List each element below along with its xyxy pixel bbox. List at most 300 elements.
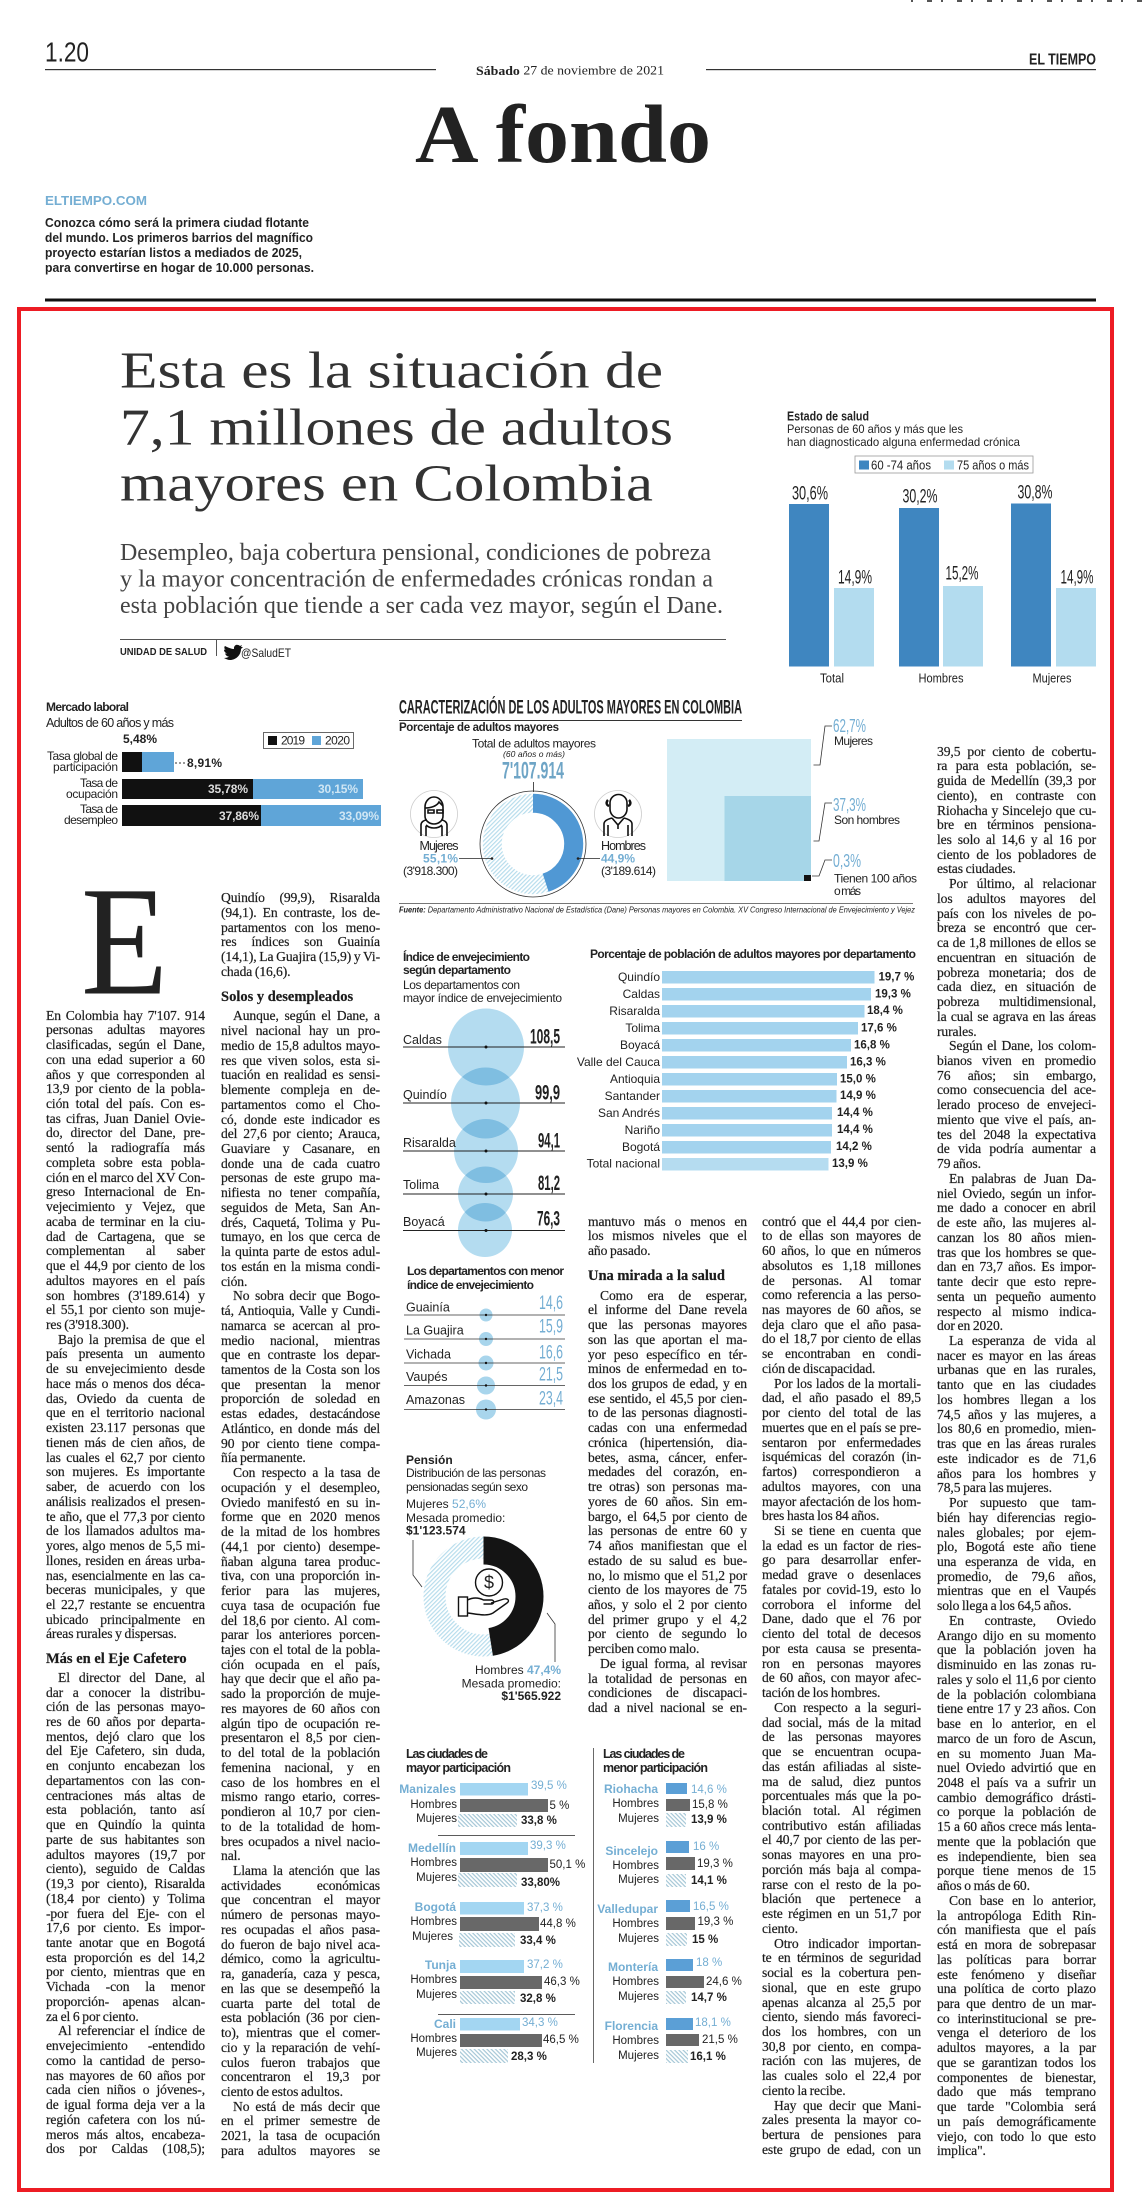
article column 5: este indicador es de 71,6 [937, 1451, 1096, 1466]
article column 3: yores de 60 años. Sin em- [588, 1494, 747, 1509]
article column 2: 90 por ciento tiene compa- [221, 1436, 380, 1451]
article column 5: este fenómeno y diseñar [937, 1967, 1096, 1982]
Sincelejo: 14,1 % [691, 1875, 727, 1887]
article column 5: En contraste, Oviedo [949, 1613, 1096, 1628]
article column 4: porción más baja al compa- [762, 1862, 921, 1877]
Sincelejo: 16 % [693, 1841, 719, 1853]
article column 5: un país demográficamente [937, 2114, 1096, 2129]
article column 2: para adultos mayores se [221, 2143, 380, 2158]
article column 4: adultos mayores, con una [762, 1479, 921, 1494]
article column 4: bertura de pensiones para [762, 2127, 921, 2142]
article column 5: mente que la población que [937, 1834, 1096, 1849]
row: Quindio: 19,7 % [878, 972, 914, 984]
label: hombres pension: Mesada promedio: [462, 1676, 561, 1690]
heading [406, 1747, 511, 1775]
article column 5: es independiente, bien sea [937, 1849, 1096, 1864]
Valledupar: Hombres [612, 1918, 659, 1930]
callout: 0,3%: Tienen 100 años [834, 872, 917, 886]
row: Tolima [403, 1172, 565, 1196]
Valledupar: 19,3 % [698, 1916, 733, 1928]
article column 4: das están afiliadas al siste- [762, 1759, 921, 1774]
Manizales: Hombres [410, 1799, 457, 1811]
article column 3: año pasado. [588, 1243, 650, 1258]
article column 3: son las que aportan el ma- [588, 1332, 747, 1347]
bars total [789, 484, 874, 686]
article column 1: de los llamados adultos ma- [46, 1523, 205, 1538]
icon: hand holding coin [458, 1569, 508, 1616]
article column 4: dos los hombres, con un [762, 2024, 921, 2039]
Monteria: 24,6 % [706, 1976, 742, 1988]
Manizales [399, 1780, 569, 1827]
article column 4: el 40,7 por ciento de las per- [762, 1832, 921, 1847]
article column 5: componentes de bienestar, [937, 2070, 1096, 2085]
total adultos mayores [472, 736, 596, 792]
article column 5: Riohacha y Sincelejo que cu- [937, 803, 1096, 818]
article column 4: ción de discapacidad. [762, 1361, 875, 1376]
Bogota: 33,4 % [520, 1935, 556, 1947]
main headline [120, 342, 673, 512]
article column 1: como la cantidad de perso- [46, 2053, 205, 2068]
mercado laboral heading: Adultos de 60 años y más [46, 716, 174, 730]
article column 2: cuya tasa de ocupación fue [221, 1598, 380, 1613]
row: Boyaca [620, 1038, 890, 1052]
article column 1: departamentos con las con- [46, 1773, 205, 1788]
article column 5: años o más de 60. [937, 1878, 1030, 1893]
article column 1 [46, 1008, 206, 2156]
article column 3: los mismos niveles que el [588, 1228, 747, 1243]
article column 4: ciento. [762, 1921, 798, 1936]
article column 4: ciento del total de decesos [762, 1626, 921, 1641]
Florencia: 21,5 % [702, 2034, 738, 2046]
article column 1: las cuales el 62,7 por ciento [46, 1450, 205, 1465]
Bogota: 44,8 % [540, 1918, 576, 1930]
article column 2: número de personas mayo- [221, 1907, 380, 1922]
article column 5: venga el deterioro de los [937, 2025, 1096, 2040]
article column 2: medio de 15,8 adultos mayo- [221, 1038, 380, 1053]
Bogota: Mujeres [412, 1931, 453, 1943]
article column 5: me dado a conocer en abril [937, 1200, 1096, 1215]
Valledupar: 16,5 % [693, 1901, 729, 1913]
article column 3: ciento de los mayores de 75 [588, 1582, 747, 1597]
Florencia [605, 2017, 738, 2063]
heading [603, 1747, 708, 1775]
callout: 0,3%: o más [834, 884, 861, 898]
row: San Andres: 14,4 % [837, 1107, 873, 1119]
article column 5: los hombres llegan a los [937, 1392, 1096, 1407]
article column 2: démico, como la agricultu- [221, 1951, 380, 1966]
article column 2: donde una de cada cuatro [221, 1156, 380, 1171]
article column 3: años, y solo el 2 por ciento [588, 1597, 747, 1612]
article column 4 [762, 1214, 922, 2158]
label: hombres pension [462, 1613, 561, 1703]
article column 1: existen 23.117 personas que [46, 1420, 205, 1435]
section title: A fondo [415, 88, 711, 180]
label: mujeres pension: Mujeres 52,6% [406, 1497, 486, 1511]
article column 3: medades del corazón, en- [588, 1464, 747, 1479]
article column 1: el 55,1 por ciento son muje- [46, 1302, 205, 1317]
article column 2: No está de más decir que [233, 2099, 380, 2114]
article column 1: cada cien niños o jóvenes-, [46, 2082, 205, 2097]
article column 4: contró que el 44,4 por cien- [762, 1214, 921, 1229]
article column 2: proporción de soledad en [221, 1391, 380, 1406]
Medellin: Medellín [408, 1841, 456, 1855]
article column 4: apenas alcanza al 25,5 por [762, 1995, 921, 2010]
Riohacha: 14,6 % [691, 1784, 727, 1796]
Cali [410, 2017, 579, 2063]
article column 4: dad social, más de la mitad [762, 1715, 921, 1730]
article column 2: ción ocupada en el país, [221, 1657, 380, 1672]
estado de salud heading: Estado de salud [787, 408, 869, 424]
article column 3: no, lo mismo que el 51,2 por [588, 1568, 747, 1583]
row: Risaralda [609, 1004, 903, 1018]
article column 2: res que viven solos, esta si- [221, 1053, 380, 1068]
row: Risaralda: Risaralda [403, 1136, 456, 1150]
legend [855, 456, 1033, 473]
article column 4: 30,8 por ciento, en compa- [762, 2039, 921, 2054]
article column 2: partamentos con los meno- [221, 920, 380, 935]
article column 4: la edad es un factor de ries- [762, 1538, 921, 1553]
article column 2: ocupación y el desempleo, [221, 1480, 380, 1495]
row: Vaupes: 21,5 [539, 1364, 563, 1386]
legend 2019 / 2020 [264, 732, 354, 748]
article column 5: pobreza monetaria; dos de [937, 965, 1096, 980]
row: Antioquia: Antioquia [610, 1072, 660, 1086]
Tunja: 32,8 % [520, 1993, 556, 2005]
icon: hand holding coin: $ [484, 1572, 494, 1592]
article column 1: que en Quindío la quinta [46, 1817, 205, 1832]
article column 1: personas adultas mayores [46, 1022, 205, 1037]
article column 1: áreas rurales y dispersas. [46, 1626, 177, 1641]
menor indice heading: índice de envejecimiento [407, 1278, 534, 1292]
Valledupar [597, 1900, 733, 1946]
article column 5: respecto al mismo indica- [937, 1304, 1096, 1318]
article column 5: una política de corto plazo [937, 1981, 1096, 1996]
article column 1: en conjunto encabezan los [46, 1758, 205, 1773]
article column 2: Quindío (99,9), Risaralda [221, 890, 380, 905]
article column 5: tras que los hombres se que- [937, 1245, 1096, 1260]
article column 4: isquémicas del corazón (in- [762, 1449, 921, 1464]
article column 1: región cafetera con los nú- [46, 2112, 205, 2127]
article column 2: de la mitad de los hombres [221, 1524, 380, 1539]
label: hombres: 44,9% [601, 852, 635, 866]
article column 1: completa sobre esta pobla- [46, 1155, 205, 1170]
row labels: ocupación [66, 787, 118, 801]
row: Amazonas [404, 1388, 565, 1420]
Manizales: 5 % [550, 1800, 569, 1812]
article column 4: go para desarrollar enfer- [762, 1552, 921, 1567]
bar tasa global: 5,48% [123, 732, 157, 746]
article column 3: dad a nivel nacional se en- [588, 1700, 747, 1715]
article column 3: yor peso específico en tér- [588, 1347, 747, 1362]
article column 4: dad, el año pasado el 89,5 [762, 1390, 921, 1405]
article column 5: de la población colombiana [937, 1687, 1096, 1702]
article column 2: Atlántico, en donde más del [221, 1421, 380, 1436]
article column 1: por ciento, mientras que en [46, 1964, 205, 1979]
article column 1: adultos mayores en el país [46, 1273, 205, 1288]
label: hombres pension: Hombres 47,4% [475, 1663, 561, 1677]
row: Tolima: 17,6 % [861, 1022, 897, 1034]
article column 5: país con los niveles de po- [937, 906, 1096, 921]
Florencia: Hombres [612, 2035, 659, 2047]
article column 4: zales presenta la mayor co- [762, 2112, 921, 2127]
article column 1: ción de las personas mayo- [46, 1699, 205, 1714]
article column 1: za el 6 por ciento. [46, 2009, 139, 2024]
article column 2: del 18,6 por ciento. Al com- [221, 1612, 380, 1628]
row: Caldas: Caldas [623, 987, 660, 1001]
byline: @SaludET [241, 646, 292, 660]
Cali: 28,3 % [511, 2051, 547, 2063]
article column 1: 17,6 por ciento. Es impor- [46, 1920, 205, 1935]
article column 1: Bajo la premisa de que el [58, 1332, 205, 1347]
row: Valle del Cauca: Valle del Cauca [577, 1055, 660, 1069]
article column 2: ferior para las mujeres, [221, 1583, 380, 1598]
article column 1: hace más o menos dos déca- [46, 1376, 205, 1391]
article column 5: base en lo anterior, en el [937, 1716, 1096, 1731]
row: Quindio [618, 970, 914, 984]
article column 2: que presentan la menor [221, 1377, 380, 1392]
article column 5: ca de 1,8 millones de ellos se [937, 935, 1096, 950]
article column 5: encuentran en situación de [937, 950, 1096, 965]
article column 4: las cuales solo el 22,4 por [762, 2068, 921, 2083]
Bogota: Hombres [410, 1916, 457, 1928]
article column 5: solo llega a los 64,5 años. [937, 1598, 1071, 1613]
article column 1: esta proporción es del 14,2 [46, 1950, 205, 1965]
article column 1: das, Oviedo da cuenta de [46, 1391, 205, 1406]
article column 2 [220, 890, 380, 2158]
row: Risaralda: Risaralda [609, 1004, 660, 1018]
Monteria: Hombres [612, 1976, 659, 1988]
article column 1: ciento), seguido de Caldas [46, 1861, 205, 1876]
article column 4: por esta causa se presenta- [762, 1641, 921, 1656]
heading: Las ciudades de [406, 1747, 488, 1761]
article column 5: que la población joven ha [937, 1642, 1096, 1657]
source note: Fuente: Departamento Administrativo Nacional de Estadística (Dane) Personas mayores en Colombia. XV Congreso Internacional de Envejecimiento y Vejez [399, 904, 916, 914]
article column 4: Si se tiene en cuenta que [774, 1523, 921, 1538]
bars total: 14,9% [838, 568, 872, 588]
article column 1: saber, de acuerdo con los [46, 1479, 205, 1494]
article column 2: en las que se desempeñó la [221, 1981, 380, 1996]
article column 1: vejecimiento y Vejez, que [46, 1199, 205, 1214]
row: Antioquia: 15,0 % [840, 1074, 876, 1086]
legend 2019 / 2020: 2020 [325, 734, 350, 748]
Florencia: 18,1 % [695, 2017, 731, 2029]
article column 5: tras que en las áreas rurales [937, 1436, 1096, 1451]
article column 3: que las personas mayores [588, 1317, 747, 1332]
Manizales: 39,5 % [531, 1780, 567, 1792]
callout: 37,3%: 37,3% [833, 795, 866, 815]
article column 2: ñaban alguna tarea produc- [221, 1554, 380, 1569]
article column 2: tajes con el total de la pobla- [221, 1642, 380, 1657]
row: Quindio [403, 1082, 565, 1104]
article column 5: La esperanza de vida al [949, 1333, 1096, 1348]
article column 2: estas edades, destacándose [221, 1406, 380, 1421]
Riohacha: 13,9 % [691, 1814, 727, 1826]
legend 2019 / 2020: 2019 [281, 734, 305, 748]
donut: pension por sexo [434, 1548, 532, 1646]
article column 1: acaba de terminar en la ciu- [46, 1214, 205, 1229]
row labels: Tasa global de [47, 749, 118, 763]
article column 2: drés, Caquetá, Tolima y Pu- [221, 1215, 380, 1230]
label: mujeres: Mujeres [420, 839, 458, 853]
bars mujeres [1011, 482, 1096, 686]
callout: 62,7%: 62,7% [833, 716, 866, 736]
label: mujeres pension: Mesada promedio: [406, 1511, 505, 1525]
article column 2: res mayores de 60 años con [221, 1701, 380, 1716]
article column 3: del primer grupo y el 4,2 [588, 1612, 747, 1627]
article column 5: como consecuencia del ace- [937, 1082, 1096, 1097]
row: Total nacional: 13,9 % [832, 1158, 868, 1170]
article column 5: les solo al 14,6 y al 16 por [937, 832, 1096, 847]
total adultos mayores: 7'107.914 [502, 758, 564, 784]
article column 5: adultos mayores, a la par [937, 2040, 1096, 2055]
row: Vaupes: Vaupés [406, 1370, 447, 1384]
callout: 37,3%: Son hombres [834, 813, 900, 827]
article column 2: chada (16,6). [221, 964, 290, 979]
article column 1: tas cifras, Juan Daniel Ovie- [46, 1111, 205, 1126]
byline [120, 639, 726, 660]
article column 5: breza se encontró que cer- [937, 920, 1096, 935]
article column 5: dan en 73,7 años. Es impor- [937, 1259, 1096, 1274]
article column 5: tiene entre 17 y 23 años. Con [937, 1701, 1096, 1716]
article column 2: concentraron el 19,3 por [221, 2069, 380, 2084]
article column 5: de vida podría aumentar a [937, 1141, 1096, 1156]
Tunja: 37,2 % [527, 1959, 563, 1971]
row: Quindio: Quindío [618, 970, 660, 984]
label: mujeres pension [406, 1497, 505, 1587]
row: Caldas [403, 1026, 565, 1048]
bar tasa desempleo: 37,86% [219, 809, 259, 823]
article column 2: Llama la atención que las [233, 1863, 380, 1878]
article column 5: implica". [937, 2143, 986, 2158]
article column 2: res índices son Guainía [221, 934, 380, 949]
article column 5: lerado proceso de envejeci- [937, 1097, 1096, 1112]
date: Sábado 27 de noviembre de 2021 [476, 62, 664, 78]
row: Tolima: Tolima [403, 1178, 439, 1192]
article column 5: la antropóloga Edith Rin- [937, 1908, 1096, 1923]
Florencia: Florencia [605, 2019, 658, 2033]
Monteria: 18 % [696, 1957, 722, 1969]
article column 2: la quinta parte de estos adul- [221, 1244, 380, 1259]
article column 1: El director del Dane, al [58, 1670, 205, 1685]
Valledupar: 15 % [692, 1934, 718, 1946]
article column 4: 60 años, lo que en números [762, 1243, 921, 1258]
article column 1: ción total del país. Con es- [46, 1096, 205, 1111]
article column 5: estas ciudades. [937, 861, 1016, 876]
article column 2: ra, ganadería, caza y pesca, [221, 1966, 380, 1981]
row: Vichada: 16,6 [539, 1342, 563, 1364]
article column 2: namarca se acercan al pro- [221, 1318, 380, 1333]
article column 4: Otro indicador importan- [774, 1936, 921, 1951]
article column 5: la cual se agrava en las áreas [937, 1009, 1096, 1024]
Sincelejo [605, 1841, 733, 1887]
article column 1: dos por Caldas (108,5); [46, 2141, 205, 2156]
article column 3: las personas de entre 60 y [588, 1523, 747, 1538]
article column 2: nivel nacional hay un pro- [221, 1023, 380, 1038]
article column 4: sional, que en este grupo [762, 1980, 921, 1995]
row: Tolima: 81,2 [538, 1172, 560, 1195]
article column 5: nales globales; por ejem- [937, 1525, 1096, 1540]
row: Risaralda: 18,4 % [867, 1005, 903, 1017]
mercado laboral heading [46, 700, 174, 730]
article column 5: 76 años; sin embargo, [937, 1068, 1096, 1083]
article column 2: Oviedo manifestó en su in- [221, 1495, 380, 1510]
legend: 75 años o más [957, 458, 1029, 472]
article column 4: tación de los hombres. [762, 1685, 880, 1700]
article column 4: te en términos de seguridad [762, 1950, 921, 1965]
article column 2: ción. [221, 1274, 247, 1289]
article column 5: promedio, de 79,6 años, [937, 1569, 1096, 1584]
row: Vaupes [404, 1364, 565, 1394]
article column 2: personas de este grupo ma- [221, 1170, 380, 1185]
article column 2: nal. [221, 1848, 241, 1863]
article column 2: to del total de la población [221, 1745, 380, 1760]
article column 1: Más en el Eje Cafetero [46, 1651, 187, 1667]
article column 1: clasificadas, según el Dane, [46, 1037, 205, 1052]
row: Guainia [404, 1293, 565, 1322]
indice heading [403, 949, 562, 1005]
article column 4: social es la cobertura pen- [762, 1965, 921, 1980]
article column 5: en su momento Juan Ma- [937, 1746, 1096, 1761]
article column 5: bién hay diferencias regio- [937, 1510, 1096, 1525]
Sincelejo: Mujeres [618, 1874, 659, 1886]
Medellin: 39,3 % [530, 1840, 566, 1852]
article column 1: adultos mayores (19,7 por [46, 1847, 205, 1862]
article column 2: que concentran el mayor [221, 1892, 380, 1907]
estado de salud heading [787, 408, 1020, 449]
article column 4: contributivo están afiliadas [762, 1818, 921, 1833]
eltiempo.com teaser [45, 194, 314, 275]
article column 1: (18,4 por ciento) y Tolima [46, 1891, 205, 1906]
Riohacha: 15,8 % [692, 1799, 728, 1811]
article column 5: cambio demográfico drásti- [937, 1790, 1096, 1805]
article column 5: cón manifiesta que el país [937, 1922, 1096, 1937]
bars hombres: 15,2% [946, 564, 979, 584]
Monteria: Mujeres [618, 1991, 659, 2003]
pension heading: pensionadas según sexo [406, 1480, 528, 1494]
row: Vichada: Vichada [406, 1348, 451, 1362]
article column 2: res ocupadas el años pasa- [221, 1922, 380, 1937]
Riohacha: Hombres [612, 1798, 659, 1810]
article column 5: mientras que en el Vaupés [937, 1583, 1096, 1598]
article column 5: las políticas para borrar [937, 1952, 1096, 1967]
bars mujeres: Mujeres [1032, 670, 1072, 686]
eltiempo.com teaser: Conozca cómo será la primera ciudad flotante [45, 216, 309, 230]
article column 2: culos fueron trabajos que [221, 2055, 380, 2070]
article column 1: res (3'918.300). [46, 1317, 129, 1332]
indice heading: Los departamentos con [403, 978, 520, 992]
article column 5: nuel Oviedo advirtió que en [937, 1760, 1096, 1775]
bar tasa ocupacion: 35,78% [208, 782, 248, 796]
article column 2: que en contraste los depar- [221, 1347, 380, 1362]
row: Quindio: 99,9 [535, 1082, 560, 1104]
article column 2: actividades económicas [221, 1878, 380, 1893]
article column 5: niel Oviedo, según un infor- [937, 1186, 1096, 1201]
subheadline: Desempleo, baja cobertura pensional, condiciones de pobreza [120, 540, 711, 566]
article column 2: (44,1 por ciento) desempe- [221, 1539, 380, 1554]
article column 5: tante decir que esto repre- [937, 1274, 1096, 1289]
thick section rule [45, 298, 1096, 302]
article column 1: mentos, dejó claro que los [46, 1729, 205, 1744]
article column 1: 13,9 por ciento de la pobla- [46, 1081, 205, 1096]
Tunja: Hombres [410, 1974, 457, 1986]
bar tasa desempleo [122, 805, 381, 826]
article column 4: de personas. Al tomar [762, 1273, 921, 1288]
article column 3: dos los grupos de edad, y en [588, 1376, 747, 1391]
article column 1: proporción- apenas alcan- [46, 1994, 205, 2009]
row: La Guajira [404, 1316, 565, 1346]
article column 2: 2021, la tasa de ocupación [221, 2128, 380, 2143]
article column 2: tuación en realidad es sensi- [221, 1067, 380, 1082]
